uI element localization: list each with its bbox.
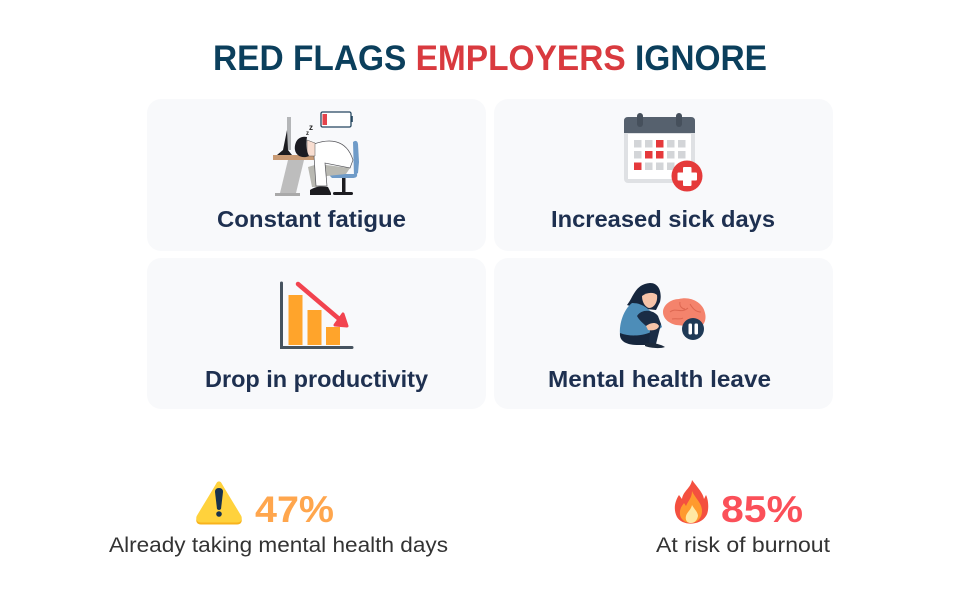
icon: flame — [675, 480, 708, 524]
panel: constant fatigue card — [147, 99, 486, 251]
icon: sleeping worker at desk — [273, 112, 359, 196]
panel: increased sick days card — [494, 99, 833, 251]
title: RED FLAGS EMPLOYERS IGNORE — [213, 39, 767, 78]
text: at risk of burnout: At risk of burnout — [656, 533, 830, 557]
stat: 85 percent: 85% — [721, 489, 803, 530]
icon: sleeping worker at desk: z — [309, 123, 313, 132]
panel: drop in productivity card — [147, 258, 486, 409]
stat: 47 percent: 47% — [255, 489, 334, 530]
label: mental health leave: Mental health leave — [548, 366, 771, 392]
icon: declining bar chart — [282, 283, 352, 348]
icon: sleeping worker at desk: z — [306, 131, 309, 137]
label: increased sick days: Increased sick days — [551, 206, 775, 232]
icon: sad woman with paused brain — [620, 283, 706, 348]
text: already taking mental health days: Already taking mental health days — [109, 533, 448, 557]
icon: calendar with medical cross — [624, 113, 702, 192]
label: constant fatigue: Constant fatigue — [217, 206, 406, 232]
panel: mental health leave card — [494, 258, 833, 409]
label: drop in productivity: Drop in productivity — [205, 366, 428, 392]
icon: warning triangle — [199, 484, 239, 522]
